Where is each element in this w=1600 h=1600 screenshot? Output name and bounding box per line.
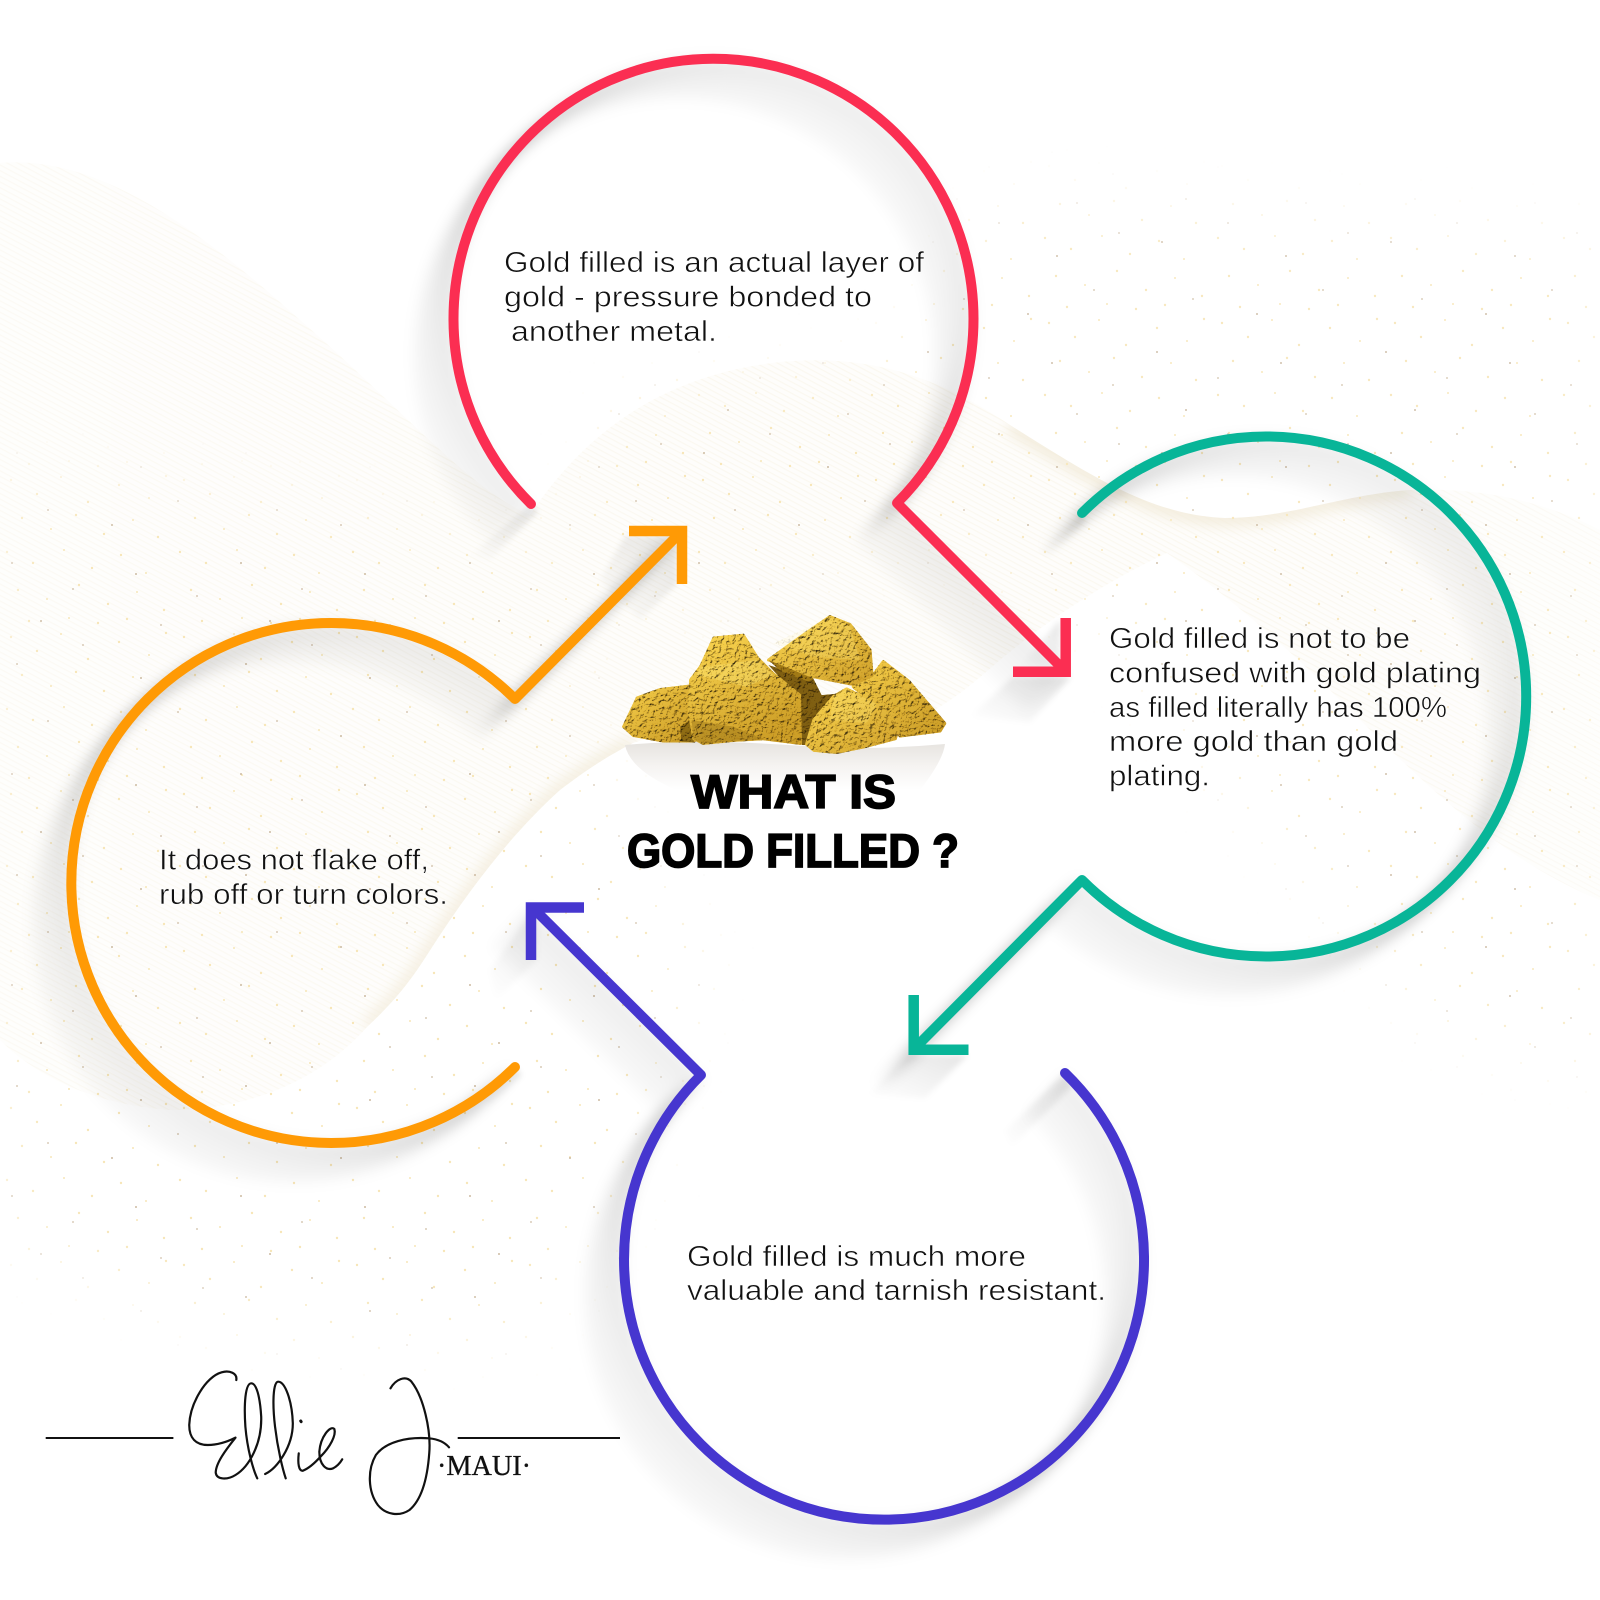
background: scattered gold dots (6, 174, 1596, 1371)
text: green loop: plating. (1109, 761, 1210, 793)
nuggets (624, 617, 945, 752)
icon: gold nuggets (624, 617, 945, 790)
text: blue loop (687, 1241, 1106, 1307)
text: red loop: another metal. (511, 316, 717, 348)
signature rule lines (46, 1437, 620, 1439)
text: green loop (1109, 623, 1481, 793)
panel: orange loop with arrow (71, 531, 682, 1143)
text: red loop: gold - pressure bonded to (504, 282, 872, 314)
text: green loop: Gold filled is not to be (1109, 623, 1410, 655)
text: orange loop: It does not flake off, (159, 844, 429, 876)
arrow head: green (914, 995, 968, 1050)
logo wordmark: ·MAUI· (437, 1451, 531, 1482)
panel: green loop with arrow (914, 436, 1526, 1050)
text: blue loop: valuable and tarnish resistant. (687, 1275, 1106, 1307)
text: green loop: confused with gold plating (1109, 657, 1481, 689)
arrow head: orange (629, 531, 682, 584)
signature script (189, 1372, 449, 1514)
logo: Ellie J Maui signature (46, 1372, 620, 1514)
arrow head: blue (531, 908, 584, 960)
title: GOLD FILLED ? (627, 824, 959, 877)
title: WHAT IS (691, 765, 896, 818)
text: green loop: as filled literally has 100% (1109, 692, 1447, 724)
arrow head: red (1013, 618, 1066, 672)
title (627, 765, 959, 877)
background: cream wave swoosh (0, 162, 1600, 1110)
panel: red loop with arrow (453, 59, 1066, 672)
text: red loop: Gold filled is an actual layer of (504, 247, 924, 279)
text: red loop (504, 247, 924, 348)
text: blue loop: Gold filled is much more (687, 1241, 1026, 1273)
panel: blue loop with arrow (531, 908, 1144, 1520)
nugget reflection (625, 742, 945, 790)
text: green loop: more gold than gold (1109, 726, 1398, 758)
text: orange loop: rub off or turn colors. (159, 879, 448, 911)
text: orange loop (159, 844, 448, 911)
